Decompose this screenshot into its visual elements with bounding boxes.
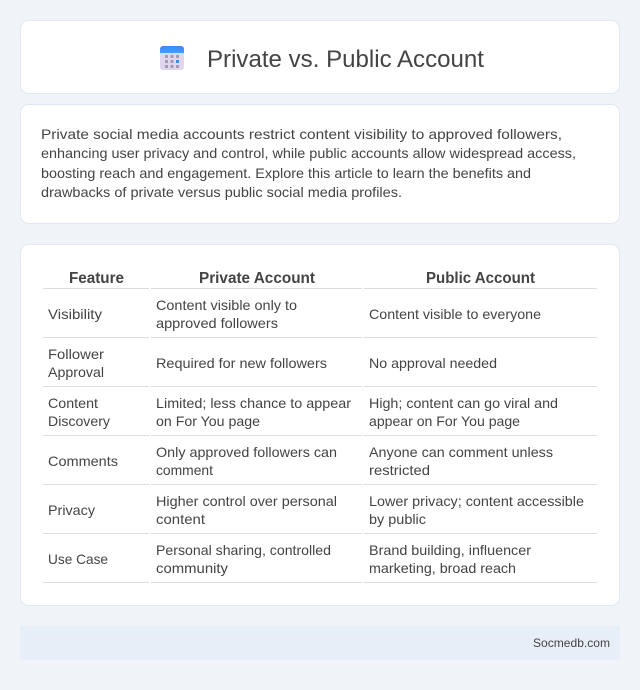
- row: use case: Use Case: [48, 551, 108, 567]
- row: use case: community: [156, 560, 228, 576]
- row: visibility: approved followers: [156, 315, 278, 331]
- row: use case: marketing, broad reach: [369, 560, 516, 576]
- row: privacy: by public: [369, 511, 426, 527]
- row: content discovery: High; content can go viral and: [369, 395, 558, 411]
- row: content discovery: [48, 395, 558, 429]
- row: comments: restricted: [369, 462, 430, 478]
- row: follower approval: Approval: [48, 364, 104, 380]
- row: follower approval: Required for new followers: [156, 355, 327, 371]
- row: content discovery: Content: [48, 395, 98, 411]
- row: privacy: [48, 493, 584, 527]
- row: use case: [48, 542, 531, 576]
- row: visibility: Visibility: [48, 306, 102, 322]
- panel: intro text: Private social media accounts restrict content visibility to approved followers,: [41, 126, 562, 142]
- row: comments: Only approved followers can: [156, 444, 337, 460]
- footer: [20, 626, 620, 660]
- row: content discovery: Discovery: [48, 413, 110, 429]
- title text: Private vs. Public Account: [207, 46, 484, 73]
- row: follower approval: [48, 346, 497, 380]
- row: privacy: content: [156, 511, 205, 527]
- footer: Socmedb.com: [533, 636, 610, 650]
- row: visibility: [48, 297, 541, 331]
- panel: intro text: drawbacks of private versus public social media profiles.: [41, 184, 402, 200]
- table header: [69, 270, 535, 287]
- row: comments: comment: [156, 462, 213, 478]
- row: comments: Anyone can comment unless: [369, 444, 553, 460]
- table header: Public Account: [426, 270, 535, 287]
- row: content discovery: on For You page: [156, 413, 260, 429]
- table header: Private Account: [199, 270, 315, 287]
- row: comments: Comments: [48, 453, 118, 469]
- row: use case: Personal sharing, controlled: [156, 542, 331, 558]
- row: privacy: Higher control over personal: [156, 493, 337, 509]
- row: content discovery: Limited; less chance to appear: [156, 395, 351, 411]
- row: visibility: Content visible only to: [156, 297, 297, 313]
- row: content discovery: appear on For You page: [369, 413, 520, 429]
- panel: intro text: boosting reach and engagement. Explore this article to learn the benefits and: [41, 165, 531, 181]
- row: follower approval: Follower: [48, 346, 104, 362]
- row: privacy: Lower privacy; content accessible: [369, 493, 584, 509]
- row: use case: Brand building, influencer: [369, 542, 531, 558]
- row: comments: [48, 444, 553, 478]
- panel: intro text: enhancing user privacy and control, while public accounts allow widespread access,: [41, 145, 576, 161]
- panel: comparison table: [20, 244, 620, 606]
- row: visibility: Content visible to everyone: [369, 306, 541, 322]
- icon: calendar: [160, 46, 184, 70]
- row: follower approval: No approval needed: [369, 355, 497, 371]
- row: privacy: Privacy: [48, 502, 95, 518]
- panel: title: [20, 20, 620, 94]
- panel: intro text: [20, 104, 620, 224]
- table header: Feature: [69, 270, 124, 287]
